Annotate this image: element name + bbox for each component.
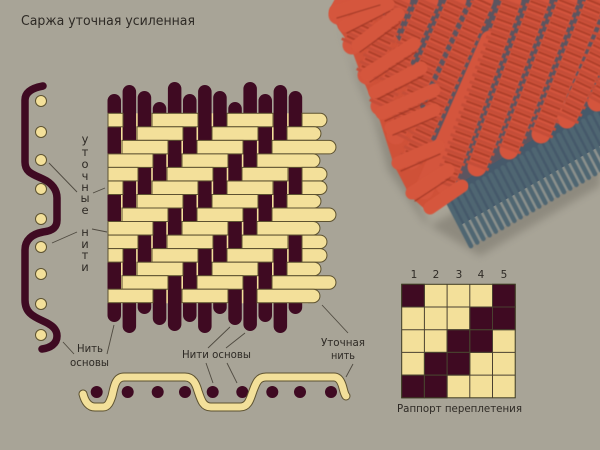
selvedge mass <box>330 0 450 212</box>
label: weft threads (vertical): у <box>82 132 89 146</box>
column numbers: 5 <box>501 269 507 281</box>
weft cross-section: bottom profile <box>83 377 346 407</box>
label: weft threads (vertical): н <box>81 180 89 194</box>
rope scallops <box>352 0 600 185</box>
label: weft threads (vertical): ч <box>82 169 88 183</box>
column numbers <box>411 269 507 281</box>
weft thread fill <box>83 377 346 407</box>
column numbers: 2 <box>433 269 439 281</box>
grid cells <box>402 284 515 398</box>
under-weft bars <box>108 113 308 303</box>
label: weft threads (vertical): т <box>82 248 89 262</box>
label: weft threads (vertical): о <box>81 157 89 171</box>
label: warp thread <box>70 342 109 369</box>
label: weft threads (vertical): и <box>81 237 89 251</box>
warp threads <box>108 82 302 333</box>
rapport grid <box>397 269 522 415</box>
warp fringe <box>440 90 600 246</box>
weft threads <box>108 113 336 303</box>
label: weft threads (vertical): е <box>81 203 89 217</box>
label: weft threads (vertical) <box>80 132 90 274</box>
label: weft threads (vertical): н <box>81 225 89 239</box>
weft ropes <box>338 0 600 190</box>
label: weft thread: Уточная <box>321 336 365 349</box>
warp thread dots <box>91 386 337 398</box>
label: warp thread: Нить <box>77 342 103 355</box>
weave diagram <box>108 82 336 333</box>
label: weft threads (vertical): т <box>82 145 89 159</box>
column numbers: 3 <box>456 269 462 281</box>
rope twist <box>352 0 600 185</box>
weft thread outline <box>83 377 346 407</box>
photo: woven fabric sample <box>330 0 600 256</box>
warp thread cross-section: left profile <box>25 86 57 349</box>
label: weft threads (vertical): и <box>81 260 89 274</box>
warp thread <box>25 86 57 349</box>
label: weft threads (vertical): ы <box>80 191 90 205</box>
column numbers: 1 <box>411 269 417 281</box>
leader lines <box>49 163 353 383</box>
label: weft thread: нить <box>331 349 355 362</box>
fabric shadow <box>335 20 600 256</box>
label: warp threads: Нити основы <box>182 348 251 361</box>
column numbers: 4 <box>478 269 485 281</box>
title: Саржа уточная усиленная <box>21 14 195 29</box>
fabric base <box>345 0 600 198</box>
weft thread dots <box>36 96 46 340</box>
label: weft thread <box>321 336 365 362</box>
selvedge loops <box>335 0 462 208</box>
label: warp thread: основы <box>70 356 109 369</box>
grid caption: Раппорт переплетения <box>397 403 522 415</box>
